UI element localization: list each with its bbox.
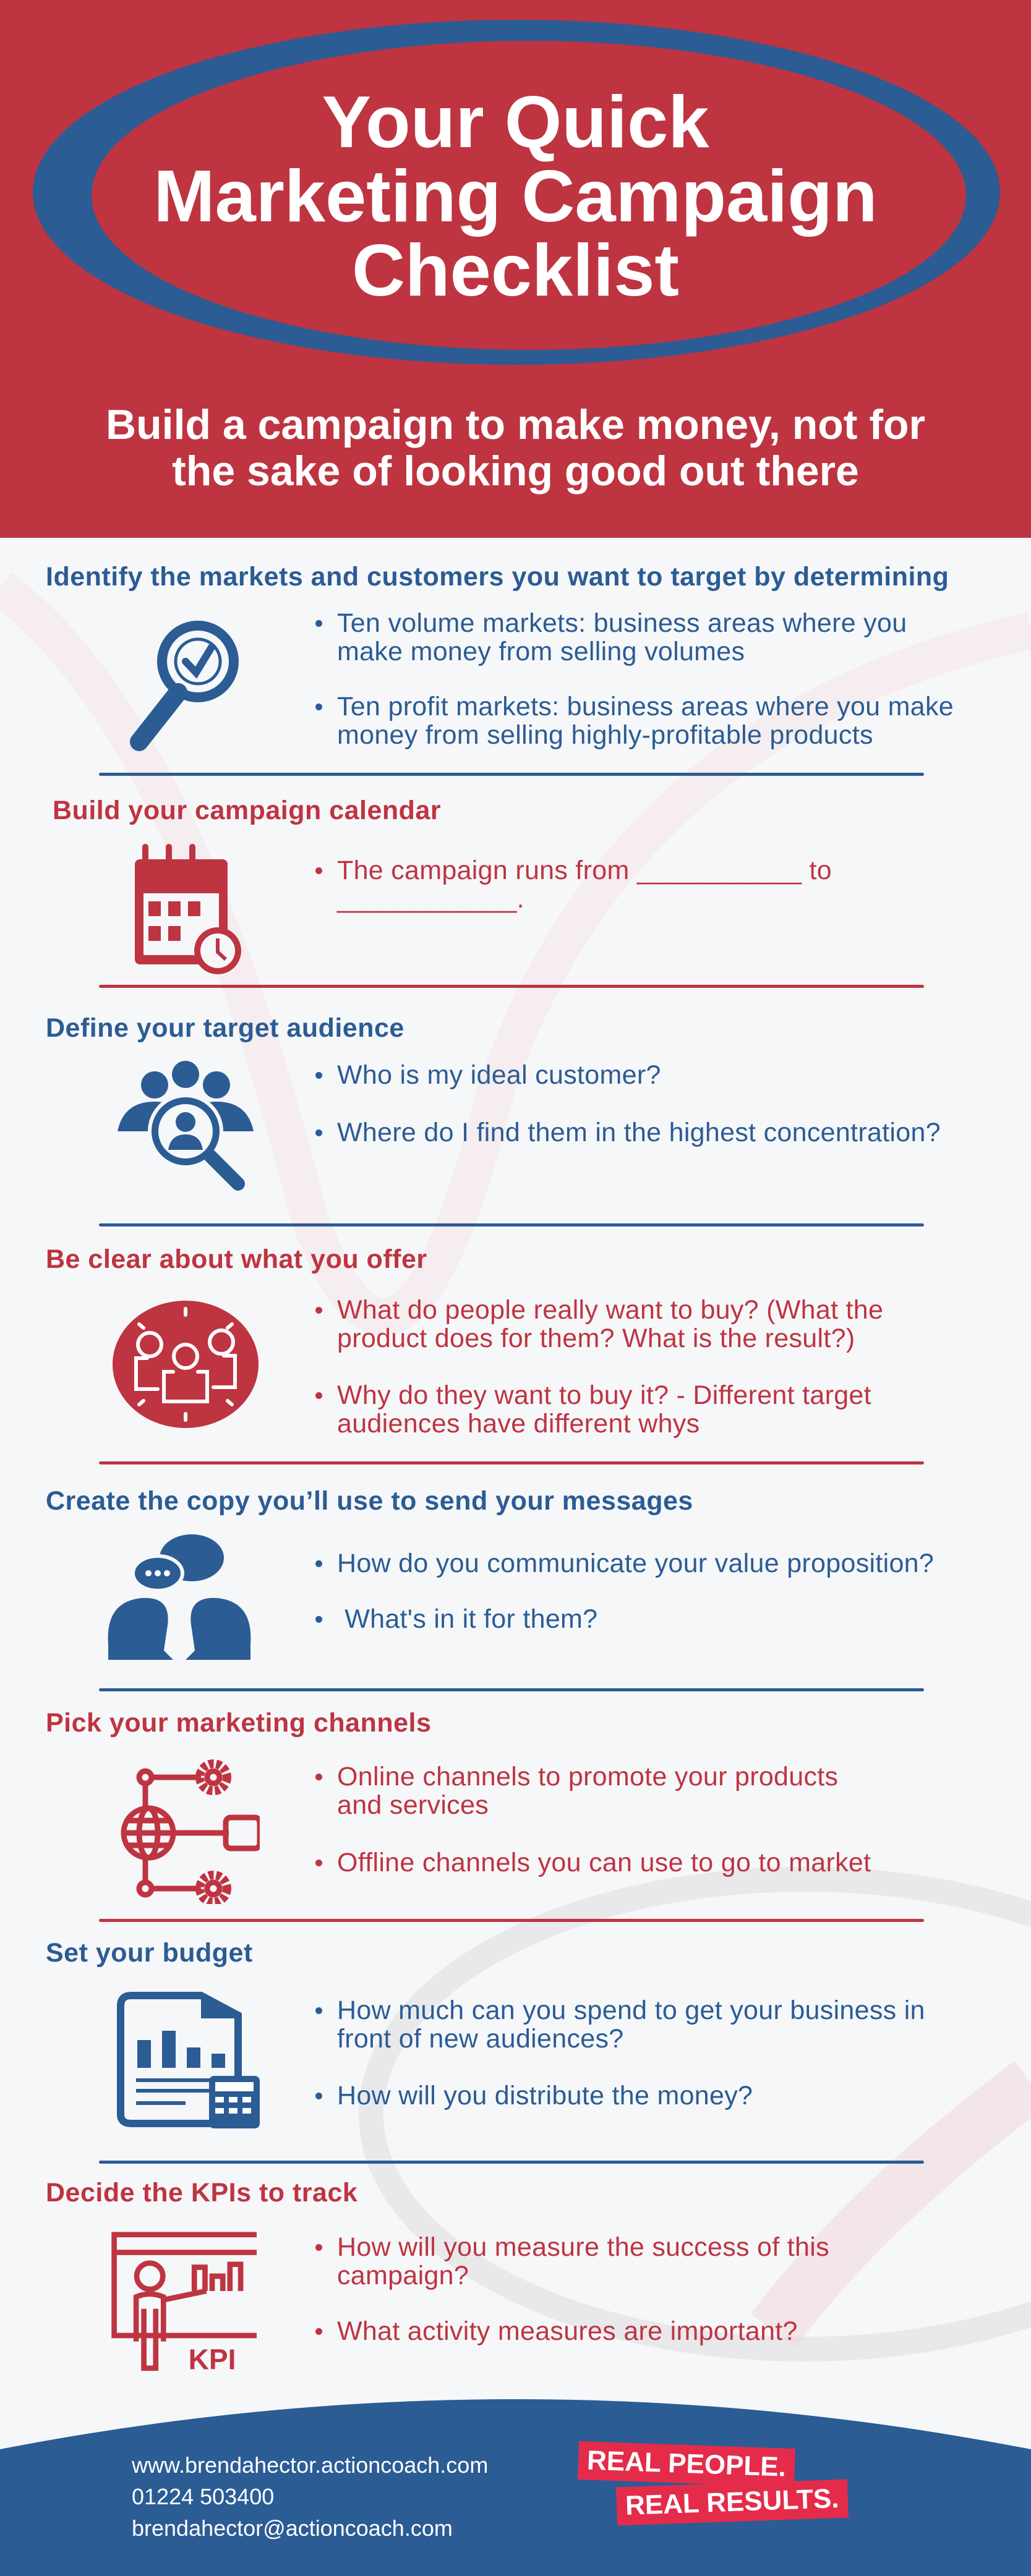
section 4 heading: Be clear about what you offer	[46, 1244, 427, 1274]
text: Ten profit markets: business areas where you make	[337, 692, 954, 721]
bullets 8: campaign?	[337, 2261, 469, 2290]
section 7 heading: Set your budget	[46, 1938, 253, 1968]
title: Marketing Campaign	[153, 155, 878, 237]
bullets 7	[315, 1996, 971, 2053]
text: money from selling highly-profitable products	[337, 720, 873, 750]
bullets 8	[315, 2233, 971, 2290]
icon: talking heads	[108, 1534, 251, 1660]
header	[0, 0, 1031, 538]
logo: real people real results: REAL PEOPLE.	[586, 2445, 787, 2483]
subtitle	[106, 401, 925, 495]
section 1 heading: Identify the markets and customers you want to target by determining	[46, 562, 949, 592]
title: Your Quick	[322, 81, 709, 163]
subtitle: the sake of looking good out there	[172, 448, 859, 495]
contact details	[132, 2452, 488, 2541]
bullets 6: Online channels to promote your products	[337, 1762, 838, 1792]
section 6 heading: Pick your marketing channels	[46, 1708, 431, 1738]
bullets 1	[315, 609, 971, 666]
subtitle: Build a campaign to make money, not for	[106, 401, 925, 448]
text: Where do I find them in the highest concentration?	[337, 1118, 941, 1147]
contact details: www.brendahector.actioncoach.com	[132, 2452, 488, 2478]
icon: budget document	[117, 1992, 260, 2128]
footer	[0, 2399, 1031, 2576]
icon: audience magnifier	[118, 1061, 254, 1191]
section 8 heading: Decide the KPIs to track	[46, 2178, 357, 2208]
text: Why do they want to buy it? - Different target	[337, 1380, 871, 1410]
logo: real people real results	[578, 2441, 849, 2526]
text: audiences have different whys	[337, 1409, 699, 1439]
section 3 heading: Define your target audience	[46, 1013, 404, 1043]
bullets 4: product does for them? What is the result?)	[337, 1324, 855, 1353]
icon: magnifier check	[130, 621, 239, 751]
icon: KPI: KPI	[189, 2344, 236, 2376]
section 2 heading: Build your campaign calendar	[53, 796, 441, 825]
logo: real people real results: REAL RESULTS.	[625, 2483, 839, 2521]
icon: people circle	[113, 1301, 259, 1428]
title: Checklist	[352, 229, 679, 312]
text: What's in it for them?	[344, 1604, 597, 1634]
bullets 5: How do you communicate your value proposition?	[337, 1549, 934, 1578]
text: What activity measures are important?	[337, 2316, 798, 2346]
bullet 2: ____________.	[337, 884, 524, 914]
bullets 7: How much can you spend to get your business in	[337, 1996, 925, 2025]
bullets 1: Ten volume markets: business areas where you	[337, 608, 907, 638]
icon: KPI	[111, 2232, 257, 2376]
contact details: 01224 503400	[132, 2484, 274, 2509]
bullets 6: and services	[337, 1790, 489, 1820]
bullets 7: front of new audiences?	[337, 2024, 623, 2054]
bullet 2	[315, 856, 971, 913]
bullets 4	[315, 1296, 971, 1353]
bullets 1: make money from selling volumes	[337, 637, 745, 666]
text: Offline channels you can use to go to market	[337, 1848, 871, 1877]
bullets 6	[315, 1762, 971, 1819]
section 5 heading: Create the copy you’ll use to send your messages	[46, 1486, 693, 1516]
bullets 8: How will you measure the success of this	[337, 2232, 829, 2262]
icon: calendar	[135, 844, 241, 974]
title	[153, 81, 878, 312]
bullets 3: Who is my ideal customer?	[337, 1060, 661, 1090]
icon: channels	[121, 1759, 260, 1904]
contact details: brendahector@actioncoach.com	[132, 2515, 453, 2541]
text: How will you distribute the money?	[337, 2081, 753, 2111]
background decoration	[0, 572, 1031, 2361]
bullet 2: The campaign runs from ___________ to	[337, 856, 832, 885]
title ellipse	[33, 20, 1000, 365]
bullets 4: What do people really want to buy? (What the	[337, 1295, 883, 1325]
